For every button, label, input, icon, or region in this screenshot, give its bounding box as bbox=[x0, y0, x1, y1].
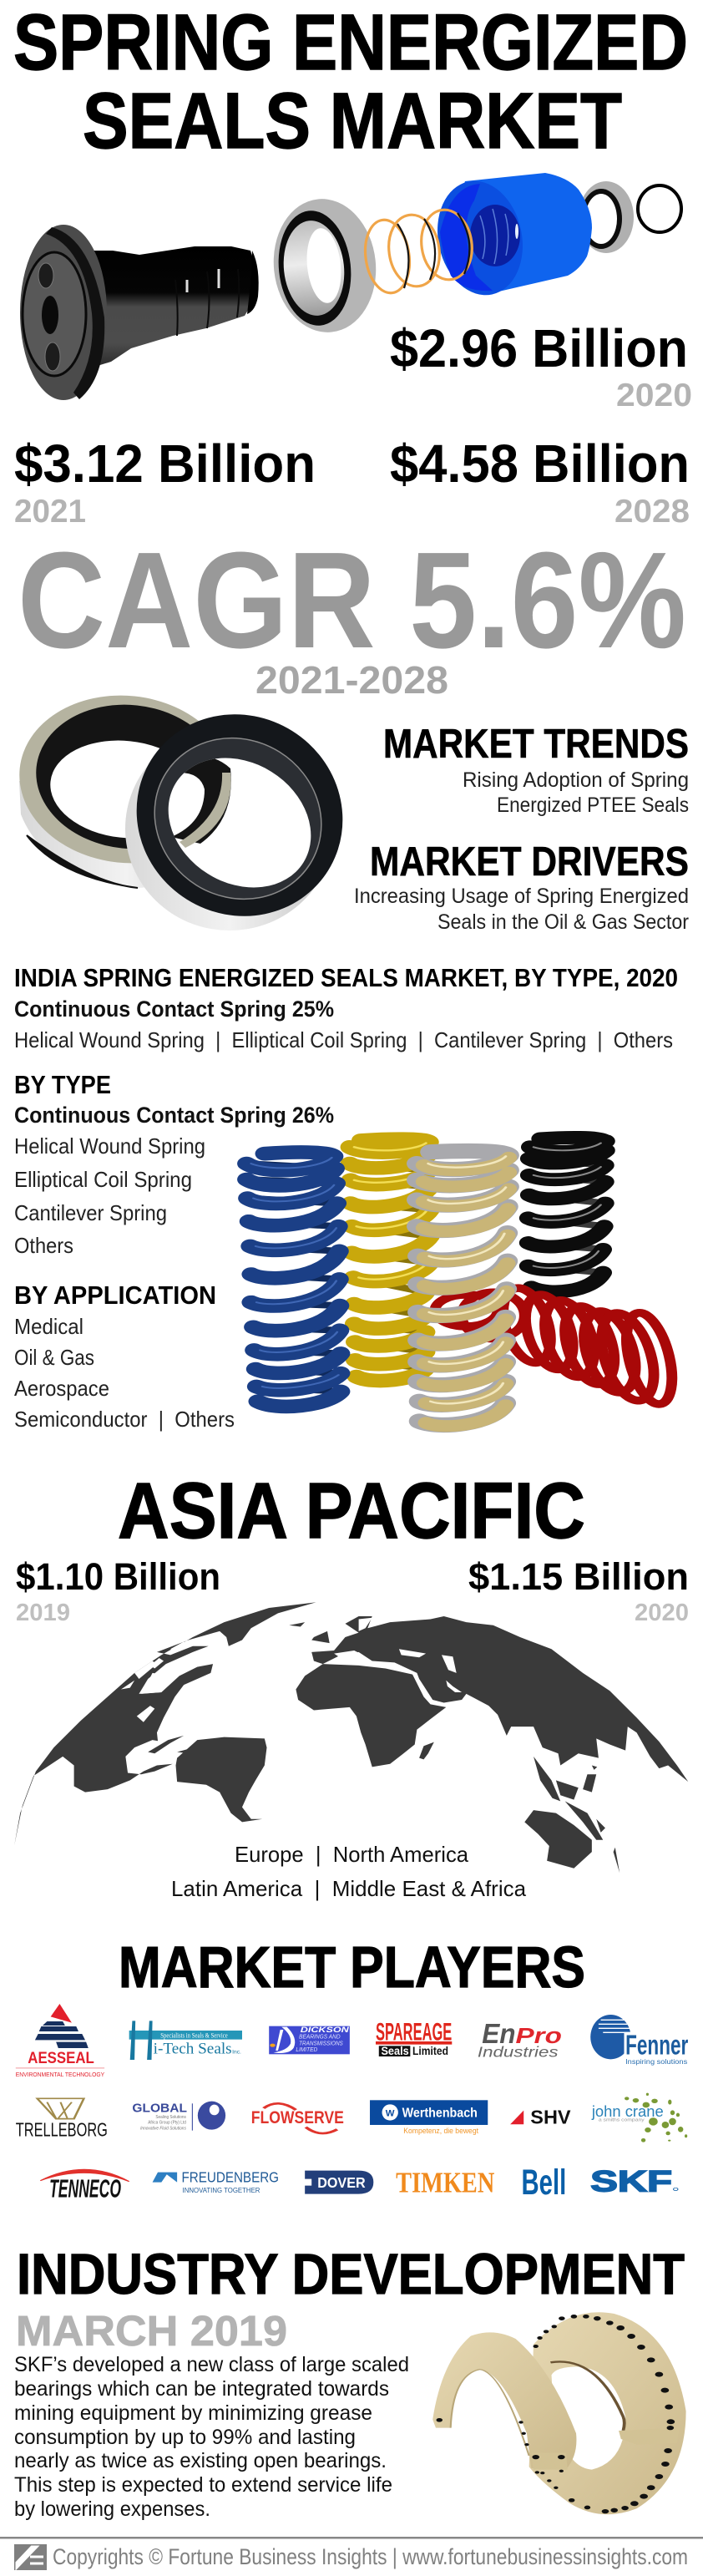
stat: 2020 market size bbox=[390, 318, 692, 413]
by type list bbox=[14, 1070, 334, 1258]
development description: by lowering expenses. bbox=[14, 2497, 210, 2521]
logo: dover bbox=[305, 2171, 373, 2194]
by type list: Elliptical Coil Spring bbox=[14, 1167, 192, 1192]
logo: tenneco bbox=[40, 2169, 129, 2203]
bearing inner edge bbox=[550, 2361, 625, 2431]
eurasia bbox=[311, 1616, 688, 1782]
back seal bbox=[11, 685, 241, 888]
development description: mining equipment by minimizing grease bbox=[14, 2401, 372, 2425]
outer split ring bbox=[529, 2312, 686, 2514]
black spring bbox=[529, 1138, 606, 1291]
by type list: BY TYPE bbox=[14, 1070, 111, 1099]
australia bbox=[524, 1810, 592, 1869]
silver ring bbox=[267, 194, 382, 337]
front seal bbox=[125, 714, 342, 931]
logo: hi-tech seals: i-Tech Seals bbox=[154, 2039, 232, 2057]
front half ring bbox=[432, 2332, 576, 2470]
heading: market players: MARKET PLAYERS bbox=[119, 1935, 585, 2000]
logo: enpro: Industries bbox=[478, 2044, 559, 2060]
logo: spareage: Seals bbox=[381, 2044, 409, 2057]
blue spring bbox=[246, 1152, 341, 1407]
india market section: Continuous Contact Spring 25% bbox=[14, 996, 334, 1022]
icon: fortune business insights logo bbox=[14, 2544, 47, 2570]
stat: asia pacific 2019: $1.10 Billion bbox=[16, 1555, 220, 1598]
by application list bbox=[14, 1280, 235, 1432]
south america bbox=[176, 1737, 267, 1822]
logo: global: Innovative Fluid Solutions bbox=[140, 2126, 186, 2131]
india market section bbox=[14, 963, 678, 1052]
by type list: Others bbox=[14, 1233, 73, 1258]
market drivers: Increasing Usage of Spring Energized bbox=[354, 885, 689, 908]
logo: werthenbach: W bbox=[386, 2108, 395, 2118]
panel: company logos bbox=[16, 2004, 688, 2203]
logo: global: Africa Group (Pty) Ltd bbox=[148, 2120, 186, 2125]
logo: freudenberg bbox=[153, 2169, 279, 2194]
development description: consumption by up to 99% and lasting bbox=[14, 2426, 356, 2449]
logo: skf: SKF bbox=[590, 2165, 672, 2198]
bolts bbox=[437, 2315, 675, 2513]
stat: asia pacific 2019: 2019 bbox=[16, 1600, 70, 1626]
logo: freudenberg: FREUDENBERG bbox=[181, 2169, 279, 2185]
small seal ring bbox=[579, 181, 634, 253]
stat: 2021 market size: 2021 bbox=[14, 494, 86, 530]
stat: 2020 market size: 2020 bbox=[616, 378, 692, 413]
panel: company logos: TIMKEN bbox=[396, 2167, 494, 2199]
north america bbox=[14, 1602, 316, 1845]
logo: hi-tech seals bbox=[129, 2021, 242, 2060]
logo: enpro: En bbox=[482, 2019, 516, 2049]
logo: hi-tech seals: Inc. bbox=[232, 2049, 241, 2055]
image: skf bearing bbox=[432, 2312, 686, 2514]
south east asia islands bbox=[534, 1757, 605, 1840]
stat: asia pacific 2019 bbox=[16, 1555, 220, 1626]
title: SEALS MARKET bbox=[83, 77, 622, 165]
logo: aesseal: ENVIRONMENTAL TECHNOLOGY bbox=[16, 2071, 104, 2078]
africa bbox=[296, 1664, 446, 1767]
regions list bbox=[171, 1842, 527, 1901]
lower connector bbox=[531, 2428, 680, 2470]
logo: john crane bbox=[591, 2093, 687, 2142]
logo: trelleborg bbox=[16, 2098, 108, 2141]
panel: company logos: TENNECO bbox=[49, 2174, 121, 2203]
development description: nearly as twice as existing open bearings. bbox=[14, 2449, 387, 2472]
stat: 2021 market size: $3.12 Billion bbox=[14, 434, 316, 494]
by type list: Helical Wound Spring bbox=[14, 1133, 205, 1159]
logo: enpro: Pro bbox=[516, 2024, 562, 2048]
inland seas bbox=[334, 1618, 462, 1692]
shaft bbox=[20, 225, 259, 400]
logo: enpro bbox=[478, 2019, 562, 2060]
by type list: Cantilever Spring bbox=[14, 1200, 167, 1225]
logo: werthenbach bbox=[370, 2100, 488, 2135]
panel: company logos: Bell bbox=[522, 2163, 566, 2203]
image: two oil seals bbox=[19, 695, 342, 931]
development description: bearings which can be integrated towards bbox=[14, 2377, 389, 2401]
stat: 2020 market size: $2.96 Billion bbox=[390, 318, 688, 378]
caribbean islands bbox=[148, 1736, 189, 1753]
logo: freudenberg: INNOVATING TOGETHER bbox=[183, 2187, 260, 2194]
image: coil springs bbox=[246, 1138, 680, 1426]
logo: global bbox=[132, 2102, 225, 2131]
market drivers: Seals in the Oil & Gas Sector bbox=[437, 910, 689, 934]
logo: werthenbach: Werthenbach bbox=[402, 2106, 478, 2120]
logo: flowserve: FLOWSERVE bbox=[251, 2107, 344, 2127]
stat: asia pacific 2020: $1.15 Billion bbox=[468, 1555, 689, 1598]
orange spring rings bbox=[361, 206, 477, 296]
logo: dickson bbox=[269, 2026, 350, 2054]
panel: company logos: SPAREAGE bbox=[376, 2018, 452, 2046]
blue cylinder bbox=[427, 173, 592, 303]
logo: fenner bbox=[590, 2015, 688, 2066]
market trends: Rising Adoption of Spring bbox=[463, 768, 689, 792]
by application list: BY APPLICATION bbox=[14, 1280, 216, 1310]
yellow spring bbox=[350, 1139, 431, 1381]
logo: global: Sealing Solutions bbox=[155, 2115, 186, 2119]
panel: company logos: TRELLEBORG bbox=[16, 2119, 108, 2141]
regions list: Latin America | Middle East & Africa bbox=[171, 1876, 527, 1901]
logo: spareage bbox=[376, 2018, 452, 2057]
development description: SKF’s developed a new class of large scaled bbox=[14, 2353, 409, 2376]
black o-ring bbox=[638, 185, 681, 232]
by application list: Aerospace bbox=[14, 1376, 109, 1401]
great lakes and arctic gaps bbox=[121, 1641, 189, 1722]
logo: shv bbox=[510, 2107, 571, 2128]
logo: dickson: LIMITED bbox=[296, 2046, 318, 2053]
by type list: Continuous Contact Spring 26% bbox=[14, 1103, 334, 1128]
logo: werthenbach: Kompetenz, die bewegt bbox=[403, 2127, 478, 2135]
logo: shv: SHV bbox=[530, 2107, 571, 2128]
development description bbox=[14, 2353, 409, 2521]
stat: asia pacific 2020 bbox=[468, 1555, 689, 1626]
development description: This step is expected to extend service life bbox=[14, 2473, 392, 2497]
stat: 2028 market size: 2028 bbox=[614, 494, 690, 530]
stat: 2028 market size: $4.58 Billion bbox=[390, 434, 690, 494]
logo: flowserve bbox=[251, 2103, 344, 2133]
cagr callout: 2021-2028 bbox=[255, 658, 448, 702]
stat: asia pacific 2020: 2020 bbox=[635, 1600, 689, 1626]
by application list: Oil & Gas bbox=[14, 1345, 94, 1370]
logo: aesseal bbox=[16, 2004, 104, 2078]
gold spring bbox=[417, 1151, 508, 1426]
world map bbox=[14, 1602, 688, 1873]
market trends bbox=[383, 722, 689, 817]
market drivers bbox=[354, 839, 689, 934]
by application list: Semiconductor | Others bbox=[14, 1407, 235, 1432]
stat: 2021 market size bbox=[14, 434, 316, 530]
heading: asia pacific: ASIA PACIFIC bbox=[118, 1467, 585, 1555]
logo: john crane: a smiths company bbox=[599, 2117, 645, 2122]
red spring bbox=[435, 1285, 680, 1407]
logo: dickson: TRANSMISSIONS bbox=[299, 2040, 343, 2047]
regions list: Europe | North America bbox=[235, 1842, 469, 1867]
footer rule bbox=[0, 2537, 703, 2539]
logo: dover: DOVER bbox=[317, 2174, 366, 2191]
logo: aesseal: AESSEAL bbox=[28, 2050, 94, 2066]
logo: dickson: BEARINGS AND bbox=[299, 2034, 341, 2041]
madagascar bbox=[419, 1742, 434, 1759]
market trends: Energized PTEE Seals bbox=[497, 794, 689, 817]
title bbox=[13, 0, 688, 165]
logo: dickson: DICKSON bbox=[301, 2026, 350, 2034]
british isles and iceland bbox=[289, 1622, 330, 1643]
by application list: Medical bbox=[14, 1314, 83, 1339]
hero image: exploded seal assembly bbox=[20, 173, 681, 400]
logo: hi-tech seals: Specialists in Seals & Service bbox=[160, 2031, 228, 2040]
date: march 2019: MARCH 2019 bbox=[16, 2307, 287, 2355]
logo: spareage: Limited bbox=[412, 2044, 448, 2057]
stat: 2028 market size bbox=[390, 434, 690, 530]
logo: global: GLOBAL bbox=[132, 2102, 187, 2115]
